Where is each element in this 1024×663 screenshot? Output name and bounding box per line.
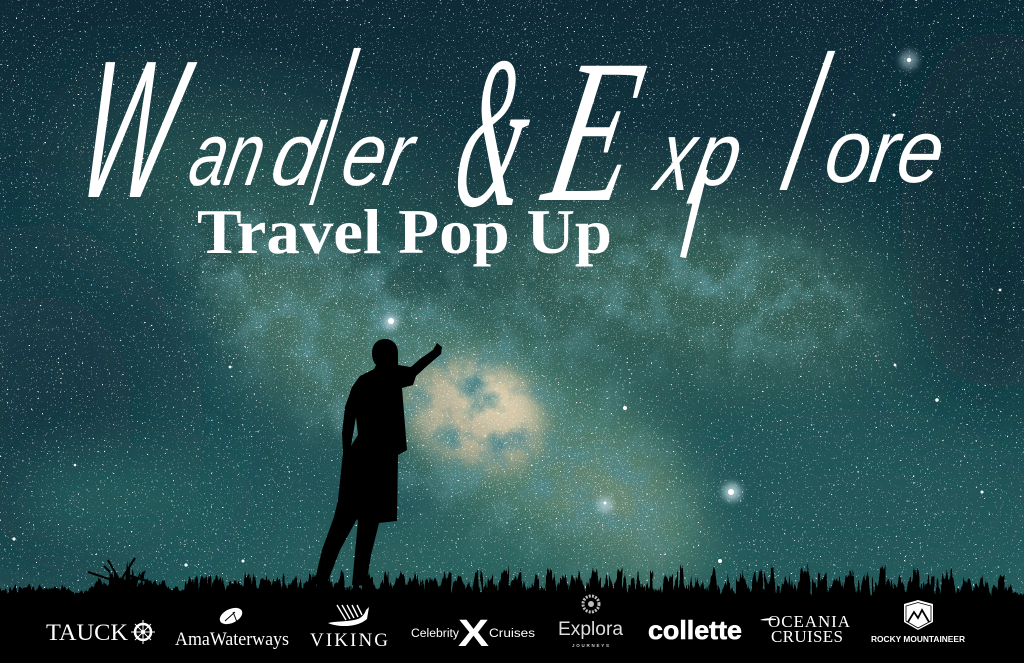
logo: Rocky Mountaineer — [871, 600, 965, 644]
main title: Wander & Explore: d — [264, 105, 332, 205]
subtitle: Travel Pop Up — [197, 197, 612, 267]
logo: Explora Journeys: Explora — [558, 619, 623, 640]
logo: Oceania Cruises: OCEANIA — [768, 612, 851, 631]
main title: Wander & Explore: & — [443, 13, 546, 253]
logo: Viking: VIKING — [310, 630, 388, 651]
logo: Explora Journeys: JOURNEYS — [572, 643, 609, 648]
logo strip — [46, 596, 965, 655]
logo: AmaWaterways — [175, 605, 289, 650]
silhouette: person pointing at the stars — [314, 339, 442, 586]
logo: Rocky Mountaineer: ROCKY MOUNTAINEER — [871, 635, 965, 644]
main title: Wander & Explore: l — [767, 17, 844, 231]
logo: Celebrity X Cruises: Celebrity — [411, 628, 459, 640]
logo: Oceania Cruises: CRUISES — [771, 627, 843, 646]
main title: Wander & Explore: W — [65, 21, 205, 239]
logo: Collette: collette — [648, 615, 742, 645]
main title: Wander & Explore — [65, 13, 951, 258]
main title: Wander & Explore: E — [529, 18, 659, 245]
logo: Oceania Cruises — [760, 612, 851, 646]
logo: Celebrity X Cruises: X — [458, 613, 490, 655]
grass silhouette — [0, 558, 1024, 663]
main title: Wander & Explore: p — [685, 104, 751, 204]
main title: Wander & Explore: x — [645, 100, 709, 212]
logo: Celebrity X Cruises: Cruises — [489, 628, 535, 640]
main title: Wander & Explore: ore — [819, 102, 951, 202]
logo: Explora Journeys — [558, 596, 623, 648]
logo: AmaWaterways: AmaWaterways — [175, 629, 289, 650]
logo: Tauck: TAUCK — [46, 620, 128, 645]
main title: Wander & Explore: an — [182, 103, 274, 204]
logo: Viking — [310, 605, 388, 651]
main title: Wander & Explore: er — [334, 104, 425, 204]
logo: Celebrity X Cruises — [411, 613, 535, 655]
